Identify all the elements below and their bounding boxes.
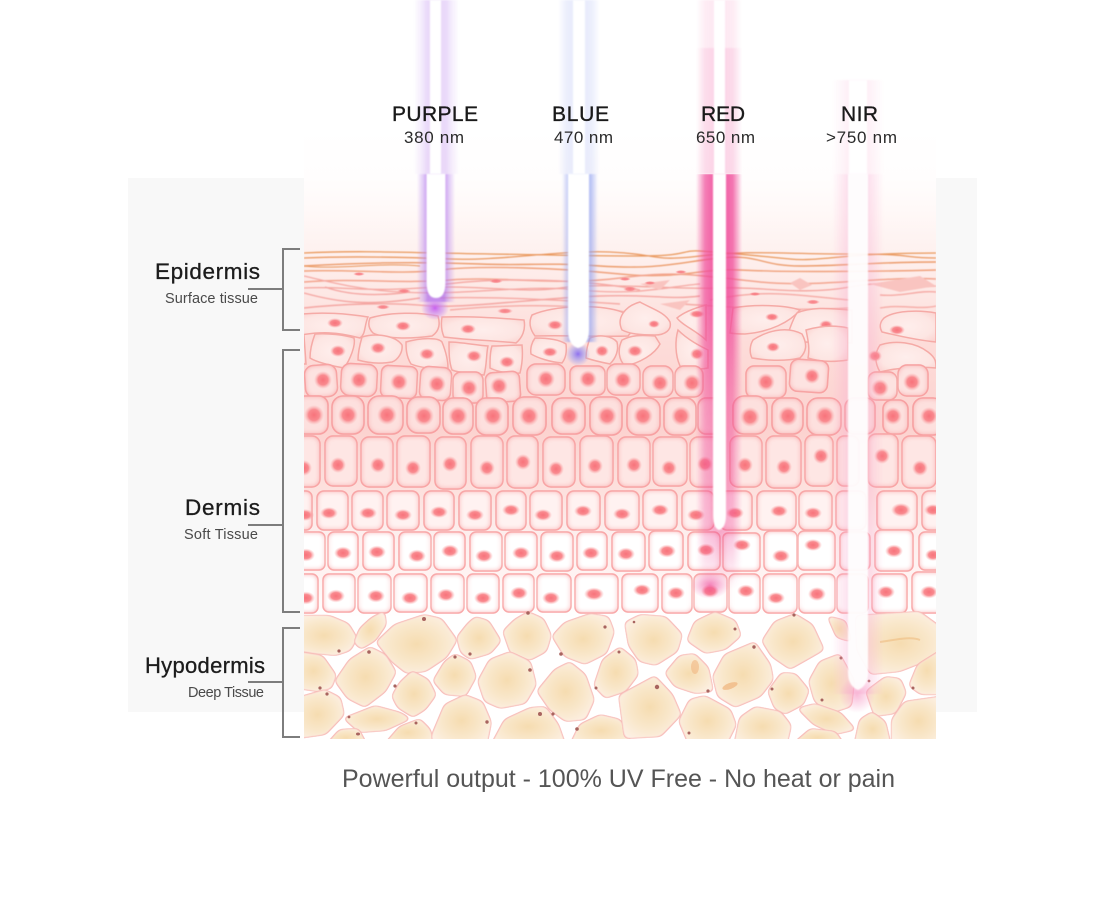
heading: epidermis: Epidermis [155, 259, 260, 284]
label: red: 650 nm [696, 128, 755, 147]
beam: purple [417, 170, 455, 320]
heading: dermis [184, 495, 260, 543]
label: NIR: NIR [841, 103, 878, 126]
heading: dermis: Dermis [185, 495, 260, 520]
stratum row: large flattened cells [296, 302, 936, 343]
label: NIR [826, 103, 897, 147]
heading: epidermis [155, 259, 260, 307]
upper beam: blue [558, 0, 600, 174]
heading: epidermis: Surface tissue [165, 291, 258, 307]
label: blue [552, 103, 613, 147]
upper beam: red [696, 0, 742, 174]
beam: blue [562, 170, 598, 366]
hypodermis fat cells [290, 610, 946, 747]
beam: near infrared [836, 174, 880, 710]
label: purple: 380 nm [404, 128, 464, 147]
label: blue: 470 nm [554, 128, 613, 147]
dermis cell row C [296, 434, 936, 489]
panel: skin cross-section [304, 173, 936, 739]
heading: dermis: Soft Tissue [184, 527, 258, 543]
heading: hypodermis: Hypodermis [145, 653, 265, 678]
bracket: dermis [248, 350, 300, 612]
label: purple: PURPLE [392, 103, 478, 126]
dermis cell row E [296, 530, 943, 571]
heading: hypodermis [145, 653, 265, 701]
bracket: epidermis [248, 249, 300, 330]
heading: hypodermis: Deep Tissue [188, 685, 264, 701]
bracket: hypodermis [248, 628, 300, 737]
dermis cell row D [296, 490, 944, 530]
upper beam: near infrared [832, 80, 884, 174]
flat nuclei in upper epidermis [353, 270, 820, 314]
label: purple [392, 103, 478, 147]
fat cell nuclei dots [318, 611, 920, 736]
upper beam: purple [414, 0, 459, 174]
label: red: RED [701, 103, 745, 126]
panel: right grey backdrop [936, 178, 977, 712]
dermis cell row F [296, 572, 944, 613]
dermis cell row A [304, 359, 928, 403]
panel: left grey backdrop [128, 178, 304, 712]
beam: red [691, 170, 742, 599]
label: red [696, 103, 755, 147]
stratum row: polygonal transition cells [296, 326, 936, 375]
label: blue: BLUE [552, 103, 609, 126]
epidermis surface lines [304, 251, 936, 312]
skin background tint [304, 215, 936, 590]
label: NIR: >750 nm [826, 128, 897, 147]
caption: Powerful output - 100% UV Free - No heat or pain [342, 765, 895, 793]
dermis cell row B [296, 396, 943, 435]
